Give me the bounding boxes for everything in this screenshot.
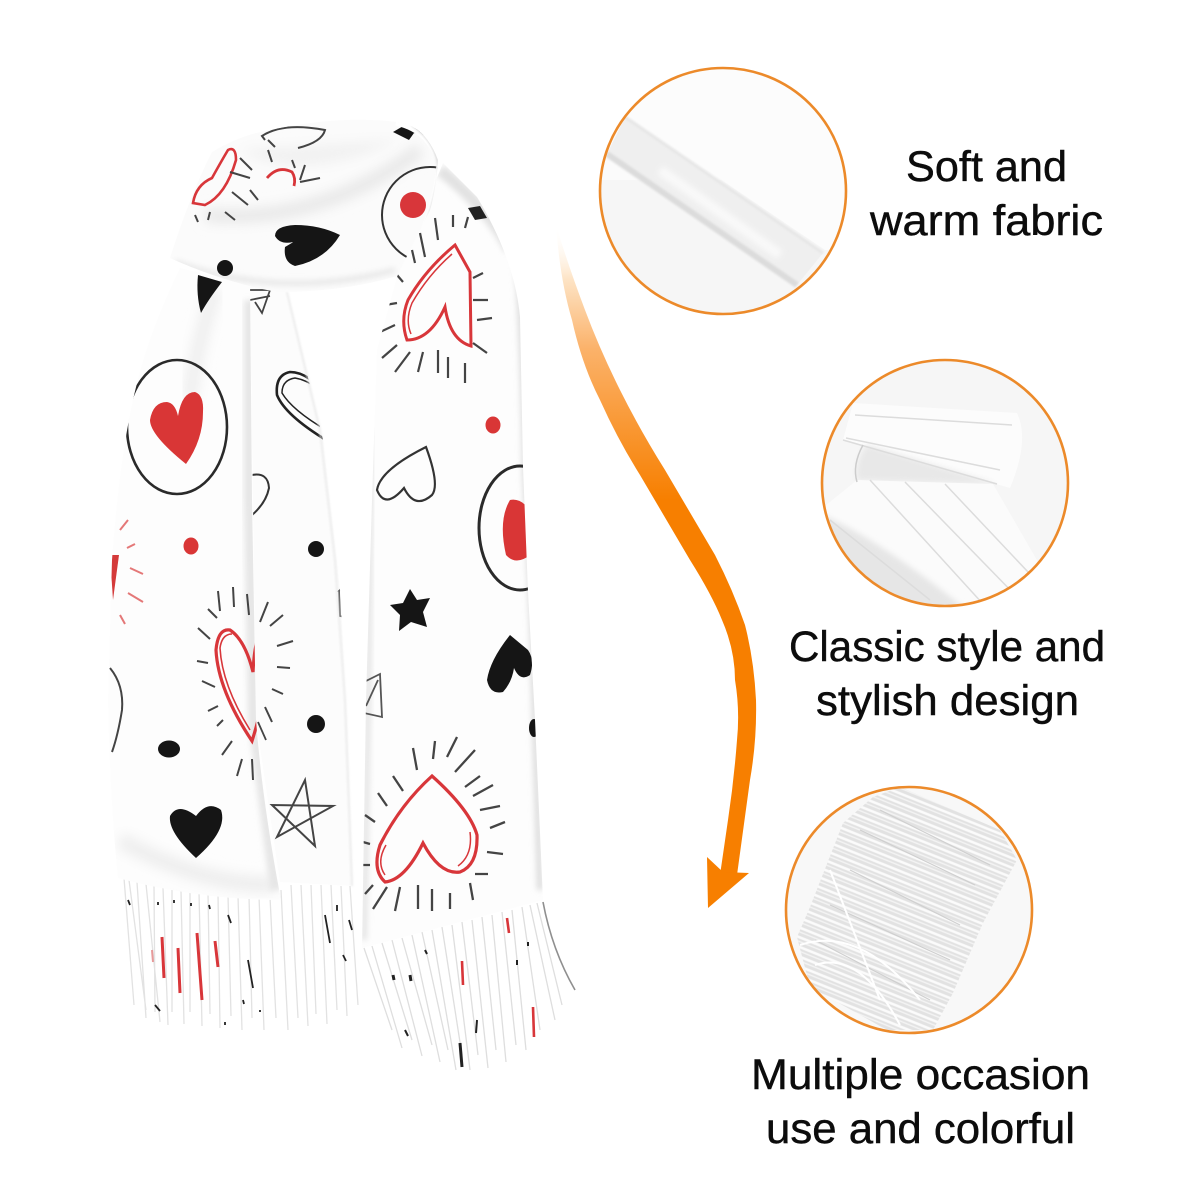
icon: circled heart right (478, 464, 528, 592)
caption 1 (869, 143, 1103, 245)
back panel pattern (250, 290, 350, 846)
icon: black heart (170, 806, 222, 858)
fabric detail image 3 (786, 787, 1032, 1033)
scarf back panel (250, 285, 353, 886)
icon: circled red heart (127, 360, 227, 494)
caption 2: stylish design (816, 677, 1079, 725)
fabric detail image 1 (600, 68, 850, 320)
icon: burst heart red (196, 587, 257, 780)
caption 2: Classic style and (789, 623, 1105, 671)
icon: black heart right (487, 635, 532, 692)
caption 3 (751, 1051, 1090, 1153)
caption 1: warm fabric (869, 197, 1103, 245)
icon: clipped outline heart (252, 475, 269, 515)
panel: multiple occasion (751, 787, 1090, 1153)
scarf neck wrap (175, 126, 438, 291)
scarf fringe back and left (124, 878, 358, 1030)
scarf fringe right (364, 903, 562, 1070)
icon: burst heart red bottom (363, 737, 505, 911)
panel: classic style (789, 360, 1105, 725)
caption 3: Multiple occasion (751, 1051, 1090, 1099)
fringe colored strands left (128, 900, 352, 1025)
arrow: curved orange arrow (556, 225, 756, 908)
panel: soft and warm fabric (600, 68, 1103, 320)
caption 3: use and colorful (766, 1105, 1075, 1153)
caption 2 (789, 623, 1105, 725)
scarf left panel (108, 268, 281, 900)
fabric detail image 2 (820, 360, 1068, 620)
icon: red heart with rays top (380, 215, 492, 383)
icon: outline star (272, 780, 333, 846)
icon: black heart on neck (275, 225, 340, 266)
icon: clipped star (250, 290, 270, 313)
caption 1: Soft and (906, 143, 1067, 191)
icon: sketched red burst (110, 520, 143, 624)
scarf product image (108, 120, 575, 1070)
icon: sketched outline heart (277, 372, 326, 440)
scarf right panel (362, 165, 542, 941)
infographic canvas (109, 66, 1103, 1144)
icon: black star (390, 589, 430, 631)
icon: outline heart (377, 447, 435, 501)
burst rays continuing on back panel (260, 602, 293, 722)
